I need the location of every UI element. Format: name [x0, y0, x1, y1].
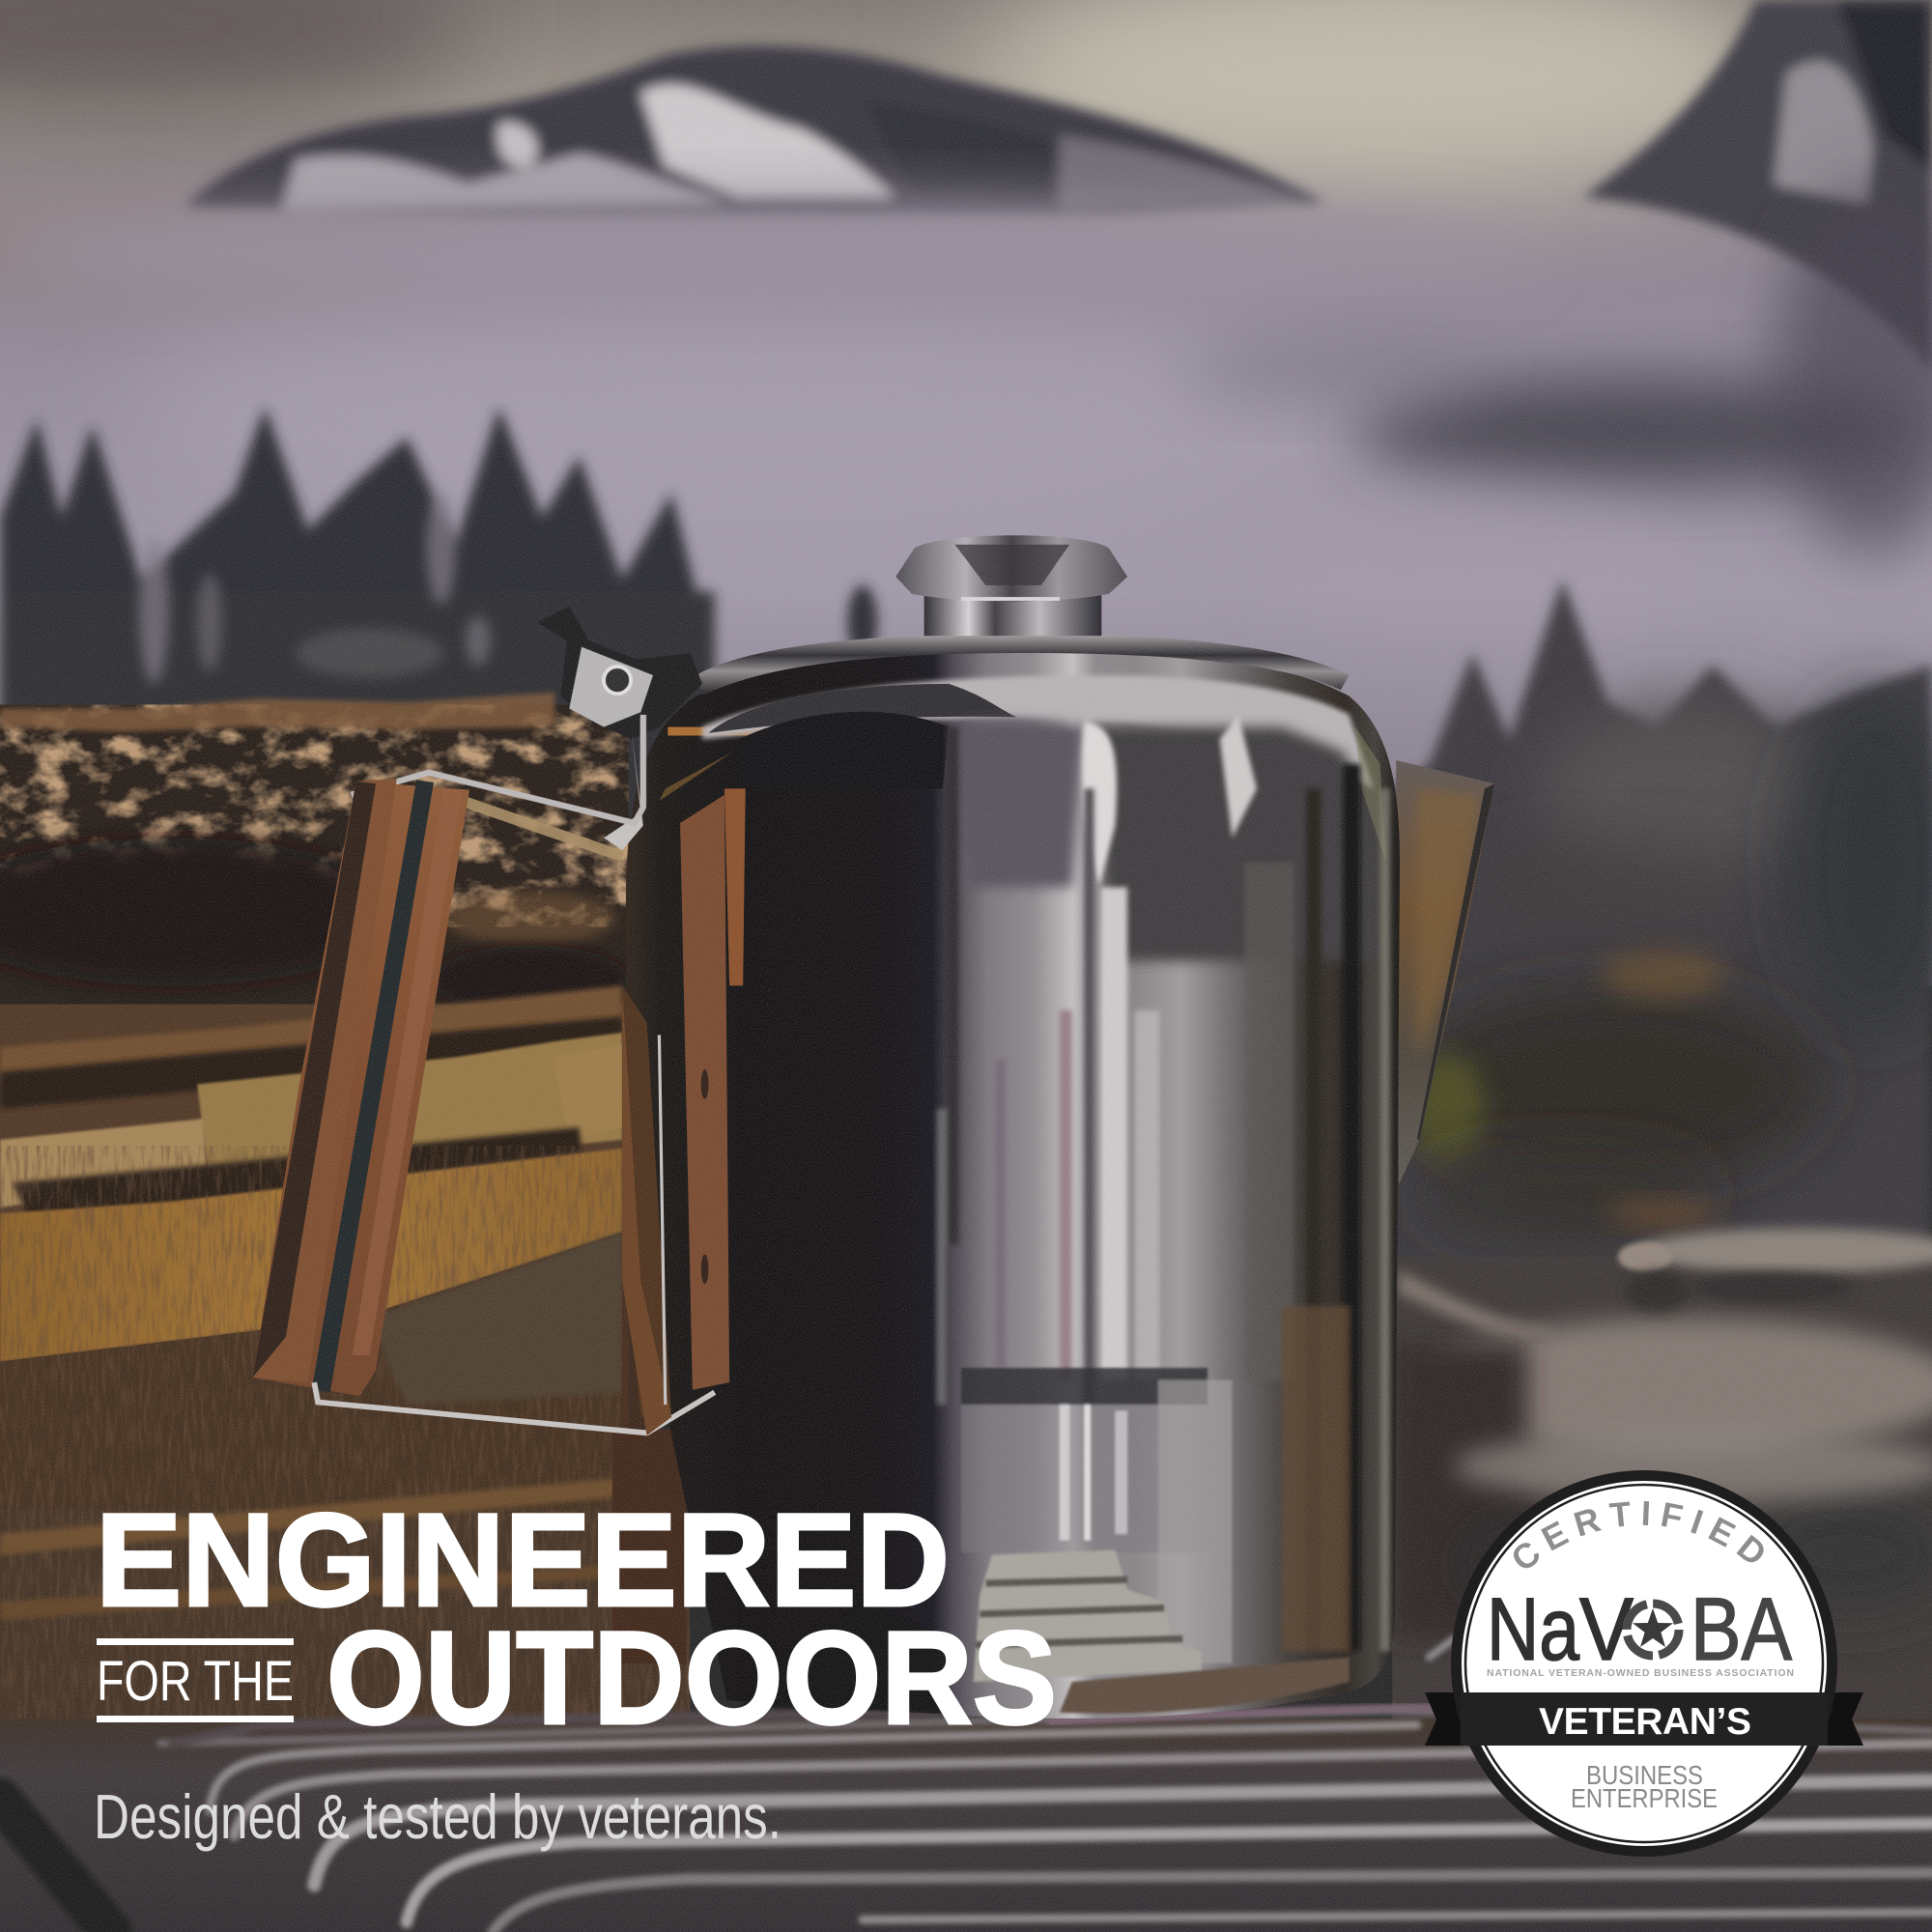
right mountain: [1583, 0, 1932, 370]
right riverbed: [1392, 1229, 1932, 1725]
wire handle top: [352, 715, 643, 856]
wooden grip slat: [252, 779, 469, 1396]
tagline: Designed & tested by veterans.: [94, 1781, 781, 1852]
badge disc: [1451, 1470, 1837, 1857]
mid-distance dark treeline in fog: [1182, 185, 1932, 640]
association full name: NATIONAL VETERAN-OWNED BUSINESS ASSOCIATION: [1487, 1667, 1794, 1679]
coffee percolator: [252, 535, 1494, 1719]
kettle body: [622, 648, 1400, 1719]
shoulder highlights: [702, 675, 1386, 961]
lower text: ENTERPRISE: ENTERPRISE: [1571, 1783, 1718, 1813]
subheading: FOR THE: FOR THE: [97, 1650, 294, 1713]
lid rim: [696, 634, 1350, 696]
glass knob: [895, 535, 1127, 636]
star roundel: [1627, 1604, 1679, 1656]
log, dark bark: [0, 693, 629, 1025]
band: [1461, 1692, 1828, 1746]
vertical reflections: [936, 727, 1390, 1651]
rule above FOR THE: [97, 1638, 294, 1645]
inner wooden grip: [622, 788, 746, 1435]
NaVOBA wordmark: Na: [1487, 1580, 1580, 1679]
lower timber: [0, 1430, 690, 1744]
stacked wood planks: [0, 985, 629, 1552]
base reflection: [739, 1368, 1350, 1714]
spout: [1396, 760, 1494, 1185]
wire handle bottom: [314, 1382, 715, 1433]
arc text: CERTIFIED: CERTIFIED: [1514, 1501, 1764, 1569]
right forest: [1392, 579, 1932, 1269]
fog veil over mountain base: [0, 201, 1528, 304]
headline: OUTDOORS: OUTDOORS: [327, 1605, 1057, 1752]
distant mountain with snow: [185, 46, 1324, 215]
left pine forest silhouette: [0, 407, 877, 838]
headline: ENGINEERED: ENGINEERED: [96, 1487, 950, 1634]
lower text: BUSINESS: BUSINESS: [1586, 1760, 1703, 1790]
band text: VETERAN'S: VETERAN’S: [1539, 1701, 1751, 1743]
rule below FOR THE: [97, 1716, 294, 1722]
steel pipe ground: [0, 1638, 1932, 1932]
ribbon tails: [1425, 1692, 1863, 1746]
NaVOBA wordmark: V: [1579, 1580, 1634, 1679]
hinge bracket: [537, 607, 702, 850]
NaVOBA certification badge: [1425, 1470, 1863, 1857]
NaVOBA wordmark: [1487, 1580, 1793, 1679]
headline block: [96, 1487, 1057, 1752]
mist gaps in left forest: [139, 493, 491, 684]
NaVOBA wordmark: BA: [1690, 1580, 1793, 1679]
sky and fog: [0, 0, 1932, 985]
